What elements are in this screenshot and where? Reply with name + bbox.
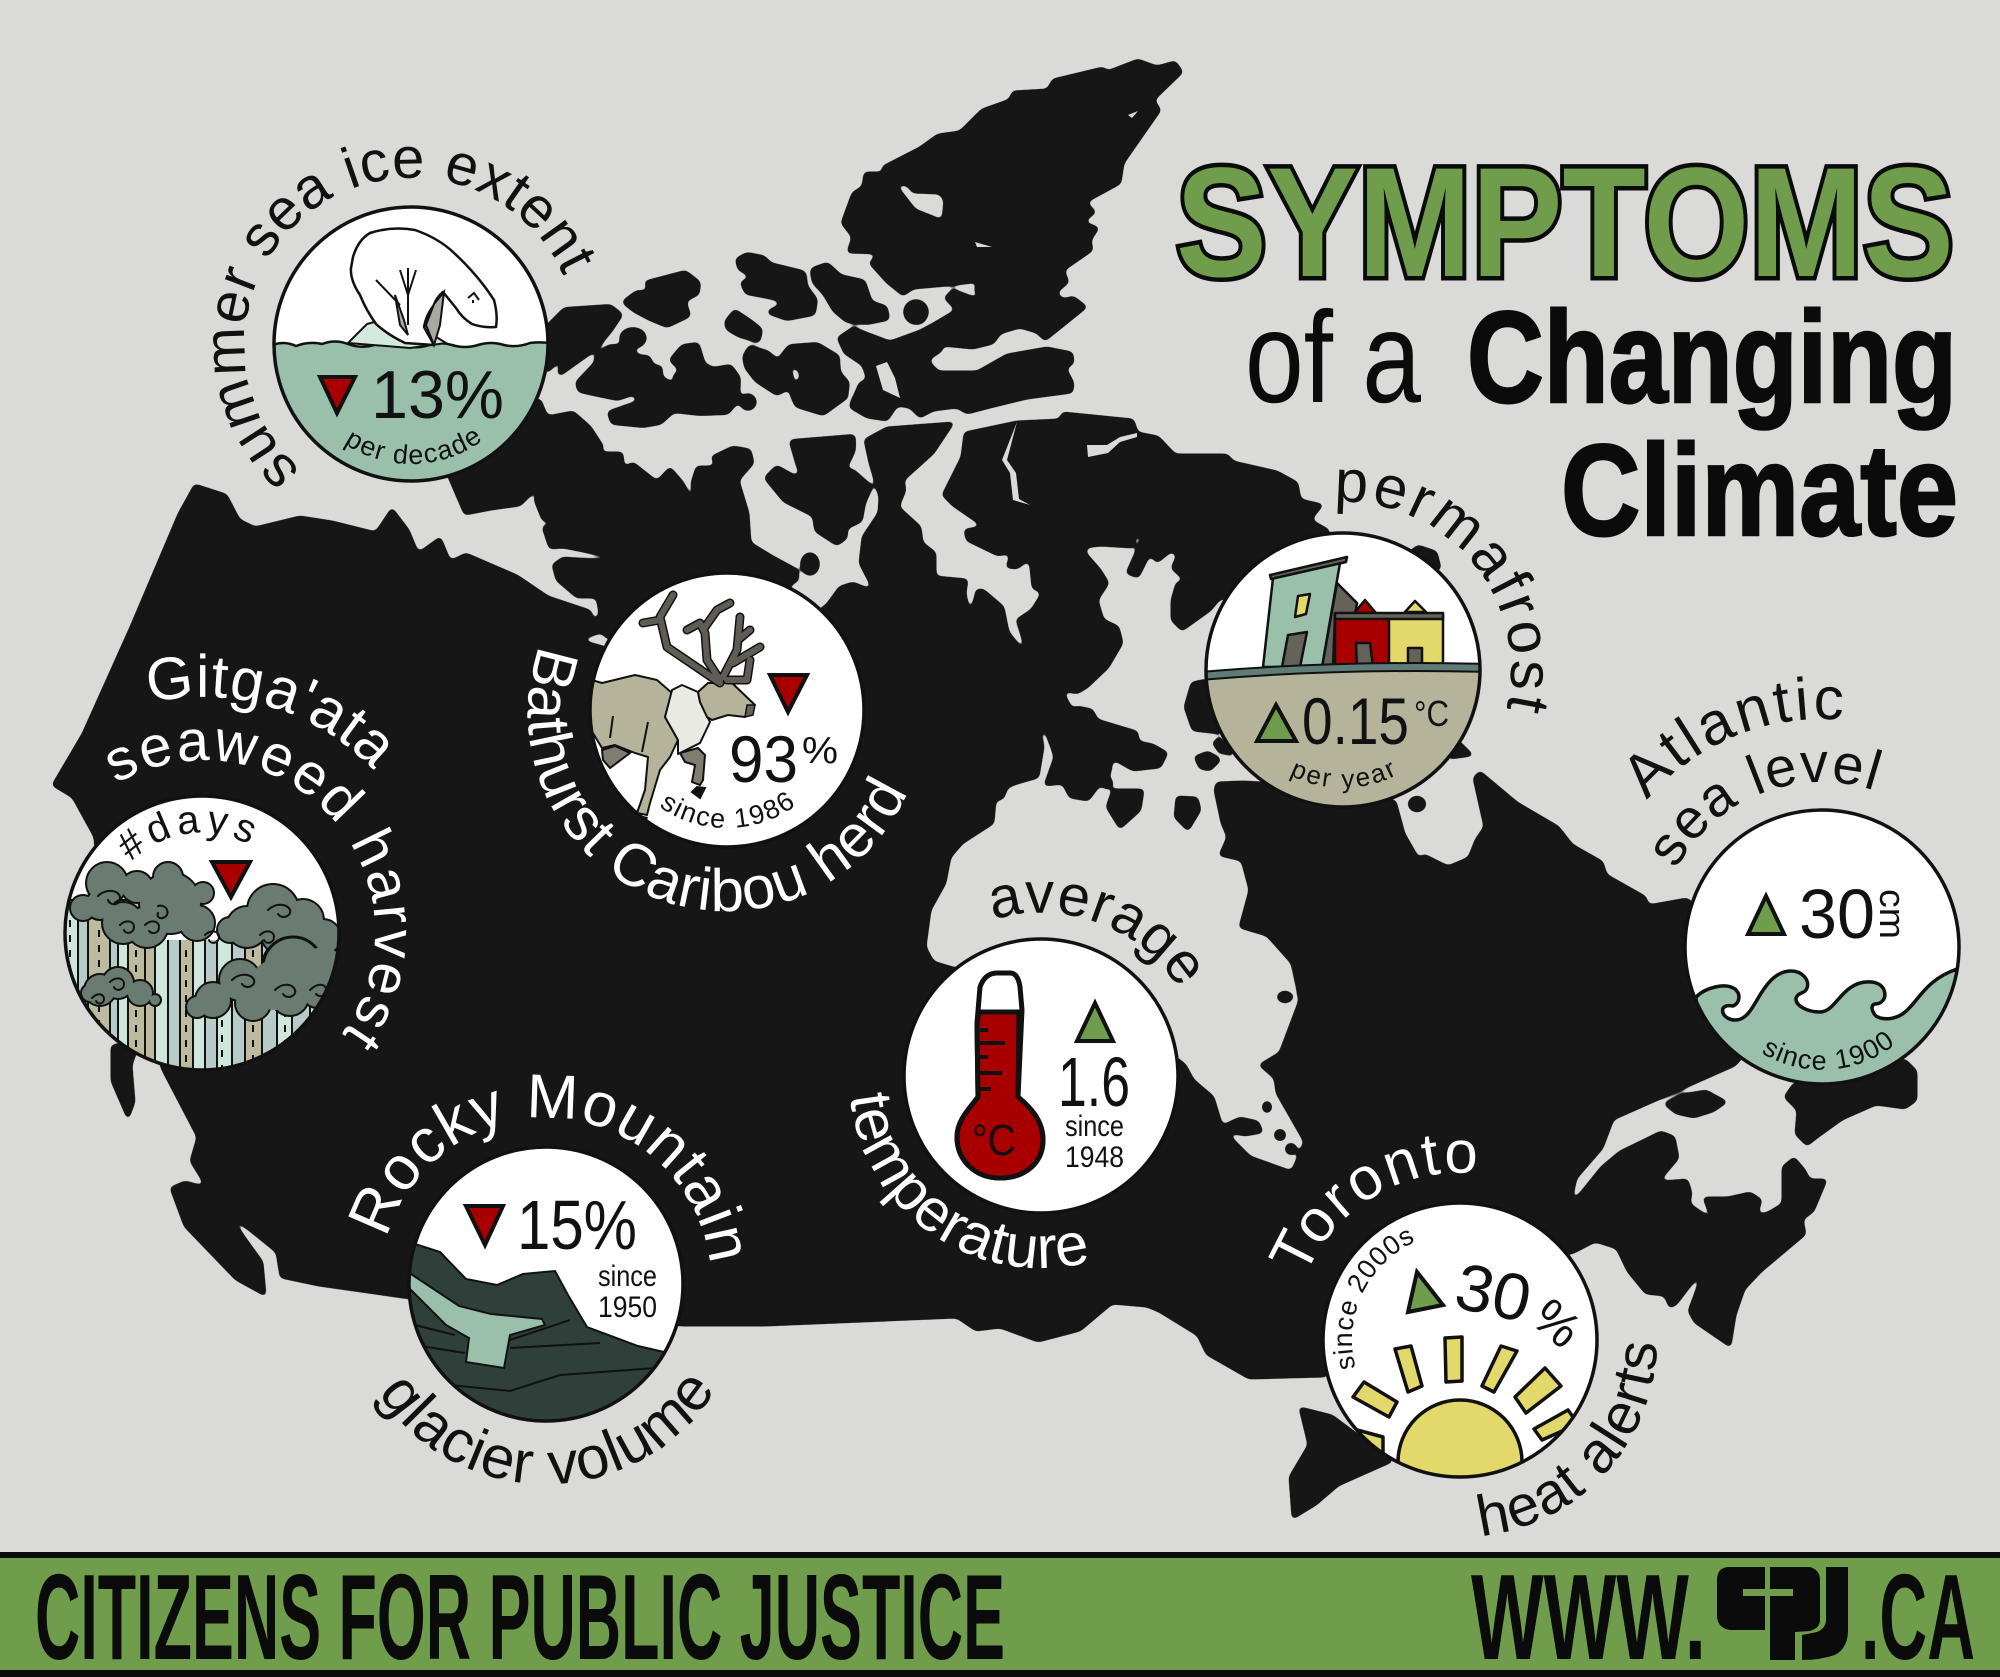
label: average: average	[992, 882, 1198, 983]
label: glacier volume: glacier volume	[374, 1378, 711, 1484]
icon: down arrow	[770, 675, 807, 712]
icon: down arrow	[320, 377, 355, 413]
stat: 15%: 15%	[517, 1186, 637, 1264]
panel: Rocky Mountain glacier volume: 1950	[598, 1291, 657, 1324]
ground	[1208, 662, 1478, 806]
label: Gitga'ata: Gitga'ata	[148, 653, 388, 770]
icon: thermometer	[957, 973, 1043, 1178]
label: heat alerts: heat alerts	[1476, 1343, 1657, 1536]
caption: since 2000s: since 2000s	[1333, 1230, 1414, 1369]
label: permafrost: permafrost	[1338, 470, 1547, 714]
stat: 13%: 13%	[371, 357, 504, 433]
icon: sun	[1351, 1335, 1573, 1476]
label: Atlantic: Atlantic	[1630, 676, 1842, 800]
label: summer sea ice extent: summer sea ice extent	[213, 146, 594, 486]
clouds	[71, 863, 343, 1020]
label: temperature: temperature	[850, 1092, 1086, 1268]
caption: #days: #days	[119, 810, 254, 860]
footer banner	[0, 1549, 2000, 1677]
panel: Bathurst Caribou herd	[527, 574, 906, 912]
panel: Atlantic sea level: cm	[1872, 889, 1913, 939]
icon: up arrow	[1408, 1272, 1443, 1312]
panel: permafrost: °C	[1414, 693, 1449, 734]
icon: caribou	[585, 595, 760, 825]
panel: average temperature: 1948	[1065, 1141, 1124, 1174]
title	[1176, 136, 1958, 563]
icon: rain and clouds	[62, 863, 345, 1080]
sea channels	[876, 111, 1138, 505]
logo: CPJ	[1717, 1567, 1848, 1660]
stat: 0.15°C: 0.15	[1302, 684, 1409, 758]
panel: summer sea ice extent	[213, 146, 594, 486]
panel: average temperature	[850, 882, 1198, 1268]
water	[276, 340, 546, 480]
label: Toronto: Toronto	[1268, 1136, 1476, 1264]
label: sea level: sea level	[1655, 749, 1882, 865]
panel: Toronto heat alerts	[1268, 1136, 1657, 1536]
caption: since 1948: since	[1065, 1110, 1124, 1143]
panel: Toronto heat alerts: %	[1522, 1288, 1592, 1359]
stat: 1.6: 1.6	[1058, 1043, 1130, 1121]
icon: thermometer: °C	[972, 1116, 1016, 1165]
panel: Atlantic sea level	[1630, 676, 1961, 1083]
stat: 93%: 93	[729, 722, 798, 796]
label: Rocky Mountain: Rocky Mountain	[348, 1074, 743, 1260]
label: Bathurst Caribou herd: Bathurst Caribou herd	[527, 650, 906, 912]
panel: Gitga'ata seaweed harvest	[63, 653, 406, 1068]
icon: up arrow	[1257, 705, 1296, 741]
panel: Rocky Mountain glacier volume	[348, 1074, 743, 1484]
label: seaweed harvest: seaweed harvest	[108, 729, 406, 1050]
caption: since 1986: since 1986	[661, 792, 794, 828]
caption: since 1900: since 1900	[1762, 1032, 1892, 1070]
panel: Bathurst Caribou herd: %	[802, 730, 838, 772]
icon: up arrow	[1077, 1003, 1113, 1041]
panel: permafrost	[1204, 470, 1547, 806]
icon: down arrow	[466, 1206, 503, 1245]
icon: houses	[1263, 557, 1443, 669]
stat: 30%: 30	[1449, 1248, 1538, 1336]
caption: per year: per year	[1288, 762, 1394, 794]
caption: per decade: per decade	[342, 431, 480, 464]
icon: waves	[1696, 969, 1957, 1095]
caption: since 1950: since	[598, 1260, 657, 1293]
heading: of a: of a	[1245, 284, 1422, 430]
icon: mountain and glacier	[410, 1244, 664, 1420]
icon: down arrow	[212, 862, 250, 897]
stat: 30 cm: 30	[1799, 875, 1875, 953]
icon: polar bear	[348, 229, 497, 348]
icon: up arrow	[1748, 896, 1784, 934]
